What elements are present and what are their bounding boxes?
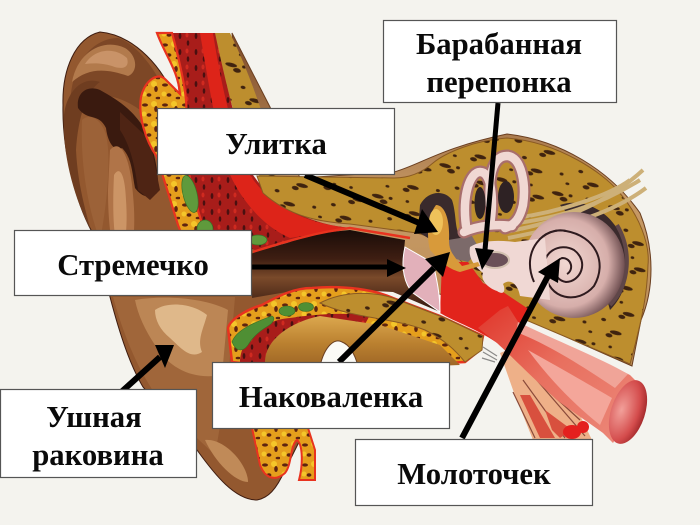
cavity dark behind cochlea (560, 203, 628, 310)
arrow: Улитка (305, 175, 438, 234)
label: Наковаленка: Наковаленка (239, 380, 423, 414)
arrow: Барабанная перепонка (475, 103, 498, 270)
red vessels (563, 421, 589, 439)
lower band (228, 287, 483, 370)
label: Ушная раковина: Ушная (46, 400, 142, 434)
green glands upper (179, 174, 267, 245)
canal holes (474, 187, 486, 219)
cochlea (523, 212, 627, 318)
label: Ушная раковина: раковина (32, 438, 164, 472)
upper tissue: yellow cartilage (140, 33, 205, 255)
white hole (320, 341, 358, 366)
spiral over vestibule (530, 230, 566, 282)
red tissue (240, 314, 370, 370)
grey cavity (448, 236, 480, 262)
oval window (481, 252, 509, 268)
arrow: Стремечко (251, 259, 406, 277)
upper tissue: bone strip (212, 33, 280, 190)
eustachian tube (478, 306, 654, 449)
label: Барабанная перепонка: перепонка (426, 65, 572, 99)
label: Улитка (158, 108, 394, 174)
lower tissue (228, 287, 483, 480)
semicircular canals (464, 156, 524, 232)
tympanum (403, 247, 440, 312)
dark concha (78, 88, 158, 196)
green gland lower (232, 302, 314, 350)
label: Стремечко (14, 230, 252, 296)
middle ear red (440, 262, 530, 345)
label: Молоточек (356, 440, 592, 506)
label: Барабанная перепонка (384, 20, 616, 102)
skin over skull (232, 33, 651, 366)
ear canal (250, 230, 440, 312)
upper rim tones (70, 38, 170, 118)
arrow: Молоточек (462, 258, 560, 438)
cavity dark around malleus (418, 193, 470, 250)
label: Барабанная перепонка: Барабанная (416, 27, 582, 61)
arrow: Ушная раковина (118, 345, 174, 395)
vestibule (470, 238, 550, 300)
lobe cartilage (252, 428, 315, 480)
concha highlight (155, 305, 207, 354)
arrow: Наковаленка (339, 252, 450, 362)
label: Ушная раковина (0, 390, 196, 478)
label: Наковаленка (212, 362, 450, 428)
inner antihelix (82, 117, 108, 240)
nerve bundle (505, 170, 646, 238)
ear anatomy illustration (63, 32, 654, 500)
label: Улитка: Улитка (225, 127, 327, 161)
malleus (428, 205, 480, 272)
label: Стремечко: Стремечко (57, 248, 209, 282)
auricle (63, 32, 320, 500)
upper tissue: muscle (172, 33, 352, 250)
muscles under tube (482, 345, 592, 440)
lobe tones (205, 440, 248, 482)
label: Молоточек: Молоточек (397, 457, 551, 491)
tan lower region (265, 316, 460, 370)
lobe shading (113, 297, 235, 455)
left rim (64, 81, 100, 262)
temporal bone (257, 138, 648, 364)
lower bone (320, 293, 483, 362)
red line over canal (253, 228, 410, 252)
